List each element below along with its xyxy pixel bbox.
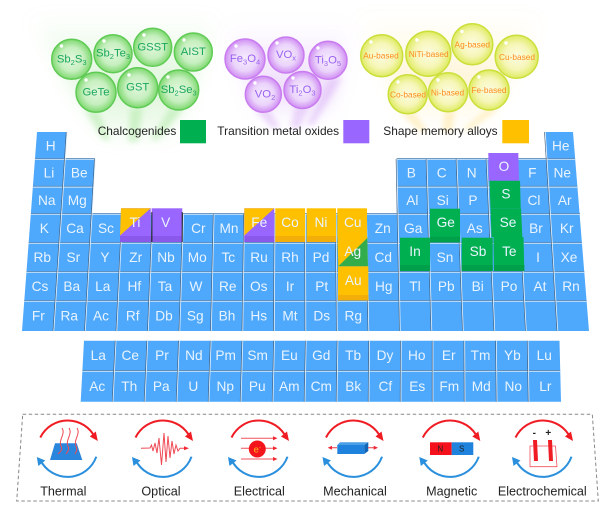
highlighted cell: Au: [338, 266, 368, 300]
element symbols: Ga: [404, 221, 423, 236]
highlighted cell: Ag: [338, 237, 368, 266]
element symbols: Sr: [66, 250, 81, 265]
bubbles: chalcogenides: AIST: [181, 46, 206, 58]
lanthanide symbols: Pm: [215, 348, 236, 363]
bubbles: transition metal oxides: [225, 37, 347, 112]
icon: thermal: [37, 420, 98, 477]
label: Electrical: Electrical: [234, 484, 285, 498]
label: Magnetic: Magnetic: [426, 484, 477, 498]
element symbols: Sc: [98, 221, 114, 236]
highlighted cell: Se: [490, 208, 522, 237]
element symbols: Cs: [32, 279, 49, 294]
legend: chalcogenides: Chalcogenides: [98, 124, 176, 138]
highlighted cell: Cu: [337, 208, 367, 237]
element symbols: Na: [38, 193, 56, 208]
element symbols: Re: [219, 279, 236, 294]
element symbols: Zr: [129, 250, 143, 265]
element symbols: Te: [502, 244, 517, 259]
label: Electrochemical: Electrochemical: [498, 484, 587, 498]
element symbols: H: [46, 138, 56, 154]
icon: magnetic: S: [459, 445, 464, 454]
glow beams: chalcogenides: [28, 14, 218, 142]
legend: chalcogenides: [98, 120, 206, 143]
element symbols: Hs: [250, 308, 267, 324]
element symbols: Cr: [191, 221, 206, 236]
element symbols: N: [467, 166, 477, 180]
legend: transition metal oxides: [217, 120, 369, 143]
element symbols: Be: [71, 166, 88, 180]
bubbles: chalcogenides: GeTe: [82, 86, 110, 98]
bubbles: transition metal oxides: 3: [243, 57, 247, 66]
lanthanide symbols: Th: [121, 379, 137, 394]
element symbols: In: [409, 244, 421, 259]
icon: electrochemical: [512, 420, 573, 477]
label: Optical: Optical: [141, 484, 181, 498]
element symbols: Bi: [472, 279, 484, 294]
highlighted cell: Co: [275, 208, 305, 242]
element symbols: Ba: [63, 279, 80, 294]
element symbols: Nb: [157, 250, 175, 265]
element symbols: Rf: [126, 308, 140, 324]
bubbles: chalcogenides: 2: [110, 52, 114, 61]
bubbles: transition metal oxides: O: [303, 84, 312, 96]
element symbols: Pt: [315, 279, 328, 294]
element symbols: Cd: [375, 250, 392, 265]
bubbles: shape memory alloys: Ag-based: [455, 39, 490, 49]
element symbols: Ne: [554, 166, 571, 180]
element symbols: Mo: [188, 250, 207, 265]
lanthanide symbols: Pa: [153, 379, 170, 394]
element symbols: Ru: [250, 250, 268, 265]
lanthanide symbols: Md: [472, 379, 491, 394]
element symbols: Rh: [281, 250, 299, 265]
label: Mechanical: Mechanical: [323, 484, 387, 498]
highlighted cell: Ti: [120, 208, 151, 242]
highlighted cell: Ni: [307, 208, 336, 242]
element symbols: Db: [155, 308, 173, 324]
bubbles: shape memory alloys: Cu-based: [499, 52, 535, 62]
lanthanide symbols: Gd: [312, 348, 330, 363]
element symbols: Tl: [409, 279, 421, 294]
icon: magnetic: [419, 420, 480, 477]
bubbles: transition metal oxides: Ti: [289, 84, 298, 96]
bubbles: chalcogenides: 3: [82, 57, 87, 66]
element symbols: Tc: [221, 250, 235, 265]
lanthanide symbols: La: [91, 348, 106, 363]
element symbols: Ar: [558, 193, 572, 208]
glow beams: transition metal oxides: [224, 24, 352, 128]
element symbols: Hg: [375, 279, 392, 294]
icon: magnetic: N: [437, 445, 443, 454]
icon: optical: [132, 420, 193, 477]
bubbles: transition metal oxides: Ti: [315, 54, 324, 66]
highlighted cell: Sb: [462, 238, 493, 271]
element symbols: Ni: [315, 215, 327, 230]
bubbles: chalcogenides: 2: [175, 88, 179, 97]
lanthanide symbols: Tm: [471, 348, 490, 363]
bubbles: shape memory alloys: Fe-based: [471, 85, 507, 95]
icon: electrical: [228, 420, 289, 477]
highlighted cell: V: [152, 208, 182, 242]
highlighted cell: Fe: [244, 208, 274, 242]
icon: electrical: e: [254, 444, 259, 456]
element symbols: Rg: [345, 308, 362, 324]
lanthanide symbols: Er: [442, 348, 456, 363]
element symbols: Kr: [560, 221, 574, 236]
element symbols: Fe: [251, 215, 267, 230]
element symbols: Ra: [61, 308, 78, 324]
bubbles: chalcogenides: 3: [126, 52, 130, 61]
lanthanide symbols: Fm: [439, 379, 459, 394]
element symbols: Cu: [344, 215, 361, 230]
bubbles: chalcogenides: Se: [179, 84, 193, 96]
element symbols: I: [536, 250, 540, 265]
element symbols: B: [407, 166, 416, 180]
lanthanide symbols: Nd: [185, 348, 203, 363]
bubbles: chalcogenides: 2: [71, 57, 75, 66]
bubbles: transition metal oxides: 2: [298, 88, 303, 97]
icon: electrochemical: -: [533, 428, 536, 439]
bubbles: chalcogenides: Te: [114, 48, 126, 60]
lanthanide symbols: Es: [409, 379, 425, 394]
element symbols: Br: [529, 221, 543, 236]
element symbols: Se: [500, 215, 516, 230]
bubbles: chalcogenides: Sb: [161, 84, 175, 96]
highlighted cell: Te: [494, 237, 524, 271]
icon: mechanical: [322, 420, 384, 477]
element symbols: Pb: [438, 279, 455, 294]
bubbles: transition metal oxides: 4: [256, 57, 260, 66]
lanthanide symbols: Yb: [504, 348, 521, 363]
element symbols: Al: [406, 193, 418, 208]
element symbols: Ir: [286, 279, 295, 294]
lanthanide and actinide block: [81, 341, 561, 402]
element symbols: Mt: [282, 308, 298, 324]
lanthanide symbols: Eu: [281, 348, 298, 363]
bubbles: chalcogenides: Sb: [96, 48, 110, 60]
element symbols: W: [190, 279, 203, 294]
highlighted cell: O: [488, 153, 519, 181]
element symbols: Ge: [437, 215, 455, 230]
bubbles: chalcogenides: S: [75, 53, 83, 65]
bubbles: chalcogenides: Sb: [57, 53, 71, 65]
bubbles: transition metal oxides: x: [292, 53, 296, 62]
element symbols: Pd: [313, 250, 329, 265]
lanthanide symbols: Cf: [378, 379, 392, 394]
element symbols: Sb: [470, 244, 487, 259]
lanthanide symbols: Am: [279, 379, 300, 394]
element symbols: Ac: [93, 308, 109, 324]
element symbols: S: [501, 186, 511, 202]
element symbols: Rn: [562, 279, 580, 294]
bubbles: chalcogenides: 3: [193, 88, 197, 97]
element symbols: Zn: [375, 221, 391, 236]
panel: stimuli dashed frame: [17, 414, 598, 501]
element symbols: Xe: [561, 250, 577, 265]
bubbles: transition metal oxides: 3: [324, 58, 328, 67]
legend: shape memory alloys: [383, 120, 529, 143]
element symbols: Li: [44, 166, 54, 180]
lanthanide symbols: Ho: [408, 348, 426, 363]
bubbles: transition metal oxides: 2: [271, 92, 275, 101]
element symbols: Ds: [313, 308, 330, 324]
lanthanide symbols: Ac: [89, 379, 105, 394]
bubbles: transition metal oxides: VO: [255, 88, 271, 100]
lanthanide symbols: U: [188, 379, 198, 394]
element symbols: K: [40, 221, 49, 236]
element symbols: Cl: [528, 193, 540, 208]
legend: transition metal oxides: Transition metal oxides: [217, 124, 339, 138]
element symbols: Ag: [344, 244, 361, 259]
lanthanide symbols: Np: [217, 379, 234, 394]
highlighted cell: In: [400, 238, 430, 271]
lanthanide symbols: Bk: [345, 379, 361, 394]
element symbols: Y: [100, 250, 110, 265]
bubbles: transition metal oxides: 5: [337, 58, 341, 67]
lanthanide symbols: Cm: [311, 379, 332, 394]
lanthanide symbols: Pu: [249, 379, 266, 394]
element symbols: O: [499, 159, 509, 174]
element symbols: Fr: [32, 308, 45, 324]
bubbles: transition metal oxides: VO: [276, 49, 292, 61]
element symbols: Mn: [219, 221, 239, 236]
element symbols: Os: [250, 279, 268, 294]
bubbles: shape memory alloys: NiTi-based: [409, 49, 449, 59]
bubbles: shape memory alloys: [361, 24, 538, 114]
glow beams: shape memory alloys: [358, 14, 542, 132]
bubbles: chalcogenides: GST: [126, 82, 149, 94]
highlighted cell: S: [490, 181, 521, 208]
element symbols: C: [437, 166, 447, 180]
lanthanide symbols: Tb: [345, 348, 361, 363]
element symbols: Ta: [158, 279, 173, 294]
element symbols: At: [534, 279, 547, 294]
element symbols: Po: [501, 279, 518, 294]
bubbles: chalcogenides: GSST: [137, 41, 168, 53]
icon: electrochemical: +: [545, 428, 551, 439]
bubbles: shape memory alloys: Au-based: [363, 51, 399, 61]
periodic table base: [22, 132, 589, 331]
icon: electrical: -: [259, 446, 261, 452]
lanthanide symbols: [89, 348, 552, 394]
element symbols: La: [95, 279, 111, 294]
element symbols: V: [161, 215, 171, 230]
bubbles: transition metal oxides: O: [328, 54, 337, 66]
element symbols: Sg: [187, 308, 204, 324]
bubbles: transition metal oxides: 3: [311, 88, 316, 97]
lanthanide symbols: Sm: [247, 348, 268, 363]
element symbols: Rb: [34, 250, 51, 265]
bubbles: shape memory alloys: Co-based: [390, 90, 426, 100]
element symbols: Au: [345, 273, 362, 288]
lanthanide symbols: Lu: [537, 348, 552, 363]
element symbols: Sn: [437, 250, 453, 265]
bubbles: transition metal oxides: O: [247, 53, 256, 65]
element symbols: Si: [437, 193, 449, 208]
element symbols: Co: [281, 215, 299, 230]
bubbles: transition metal oxides: Fe: [230, 53, 243, 65]
highlighted cell: Ge: [430, 209, 460, 242]
element symbols: Bh: [219, 308, 235, 324]
element symbols: He: [552, 138, 569, 154]
element symbols: F: [528, 166, 536, 180]
element symbols: Ti: [130, 215, 140, 230]
bubbles: shape memory alloys: Ni-based: [431, 87, 464, 97]
element symbols: [32, 138, 580, 324]
element symbols: Hf: [127, 279, 141, 294]
element symbols: As: [467, 221, 483, 236]
element symbols: P: [468, 193, 478, 208]
lanthanide symbols: No: [505, 379, 522, 394]
bubbles: chalcogenides: [52, 28, 212, 112]
lanthanide symbols: Ce: [121, 348, 139, 363]
element symbols: Mg: [68, 193, 87, 208]
lanthanide symbols: Lr: [539, 379, 552, 394]
label: Thermal: Thermal: [40, 484, 86, 498]
element symbols: Ca: [66, 221, 84, 236]
lanthanide symbols: Pr: [155, 348, 169, 363]
legend: shape memory alloys: Shape memory alloys: [383, 124, 498, 138]
lanthanide symbols: Dy: [377, 348, 394, 363]
